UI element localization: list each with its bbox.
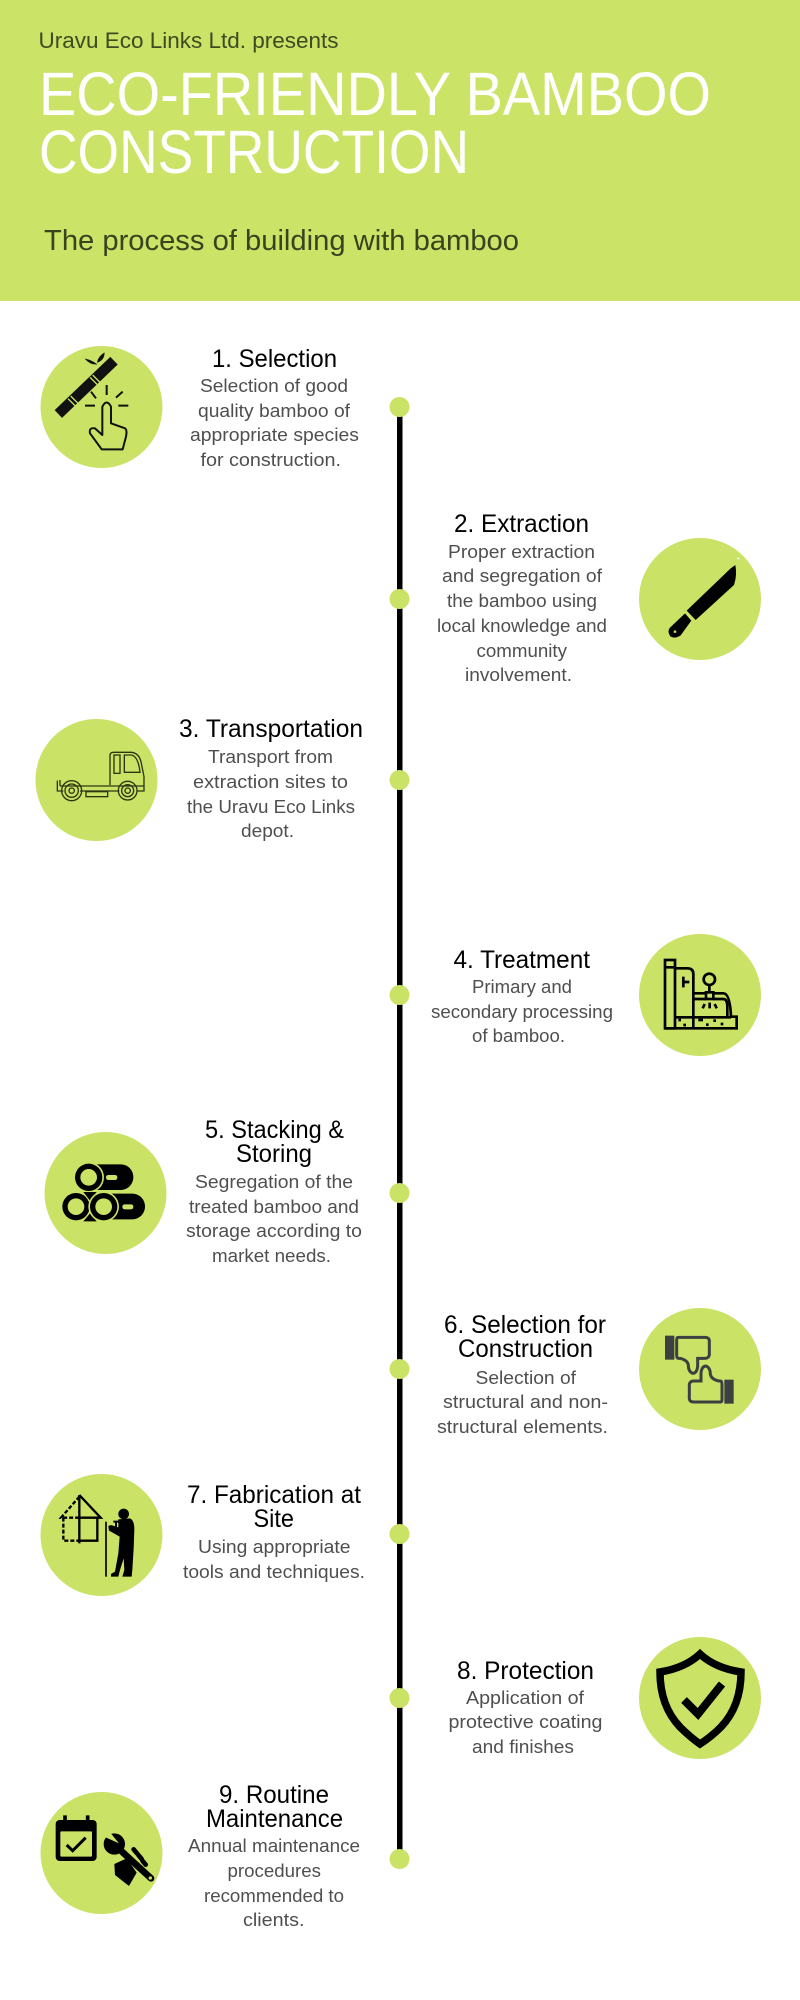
icon: house frame and worker [40,1474,162,1596]
timeline spine with step markers [390,397,410,1869]
description: community [476,641,567,661]
description [431,977,613,1046]
icon: treatment plant [639,934,761,1056]
description: structural and non- [443,1392,608,1412]
description [186,1172,362,1266]
heading [187,1481,361,1533]
heading: Storing [236,1140,312,1168]
heading: 9. Routine [219,1781,329,1809]
icon: bamboo and pointing hand [40,346,162,468]
panel: step 4 treatment [431,934,761,1056]
panel: step 2 extraction [437,510,761,685]
icon: thumbs down and up [639,1308,761,1430]
description: Annual maintenance [188,1836,360,1856]
title [39,60,711,186]
heading: Maintenance [206,1805,343,1833]
icon: truck [36,719,158,841]
description [448,1688,602,1757]
heading: 7. Fabrication at [187,1481,361,1509]
heading [205,1116,344,1168]
panel: step 1 selection [40,345,359,470]
heading [206,1781,343,1833]
description [187,747,355,841]
description: appropriate species [190,425,359,445]
description: procedures [228,1861,321,1881]
heading: 8. Protection [457,1657,594,1685]
description: storage according to [186,1221,362,1241]
description [190,376,359,470]
heading: Site [254,1505,294,1533]
description: for construction. [200,450,341,470]
description: Using appropriate [198,1537,350,1557]
description: Selection of [476,1368,577,1388]
presenter line: Uravu Eco Links Ltd. presents [38,28,338,53]
description: extraction sites to [193,772,348,792]
panel: step 5 stacking and storing [44,1116,362,1266]
description: the bamboo using [447,591,597,611]
icon: calendar and wrench [40,1792,162,1914]
description [437,1368,608,1437]
description: treated bamboo and [189,1197,359,1217]
icon: stacked logs [44,1132,166,1254]
panel: step 7 fabrication at site [40,1474,365,1596]
description: local knowledge and [437,616,607,636]
description: market needs. [212,1246,331,1266]
panel: step 3 transportation [36,715,363,841]
title: CONSTRUCTION [39,118,469,186]
title: ECO-FRIENDLY BAMBOO [39,60,711,128]
panel: step 9 routine maintenance [40,1781,360,1930]
heading: 5. Stacking & [205,1116,344,1144]
heading: Construction [458,1335,593,1363]
heading: 2. Extraction [454,510,589,538]
heading: 1. Selection [212,345,337,373]
heading: 3. Transportation [179,715,363,743]
description: recommended to [204,1886,344,1906]
heading [444,1311,606,1363]
description: secondary processing [431,1002,613,1022]
description [437,542,607,685]
description: and segregation of [442,566,603,586]
description: tools and techniques. [183,1562,365,1582]
heading: 6. Selection for [444,1311,606,1339]
description: Segregation of the [195,1172,353,1192]
description: involvement. [465,665,572,685]
description: Application of [466,1688,585,1708]
panel: step 8 protection [448,1637,761,1759]
description: Proper extraction [448,542,595,562]
description: clients. [243,1910,304,1930]
description: Selection of good [200,376,348,396]
description: Transport from [208,747,333,767]
description: depot. [241,821,294,841]
description: structural elements. [437,1417,608,1437]
description [188,1836,360,1930]
description: of bamboo. [472,1026,565,1046]
panel: step 6 selection for construction [437,1308,761,1437]
panel: header banner [0,0,800,301]
description: the Uravu Eco Links [187,797,355,817]
description: and finishes [472,1737,574,1757]
icon: machete [639,538,761,660]
description [183,1537,365,1582]
heading: 4. Treatment [454,946,590,974]
icon: shield with check [639,1637,761,1759]
description: quality bamboo of [198,401,351,421]
description: protective coating [448,1712,602,1732]
subtitle: The process of building with bamboo [44,225,519,257]
description: Primary and [472,977,572,997]
